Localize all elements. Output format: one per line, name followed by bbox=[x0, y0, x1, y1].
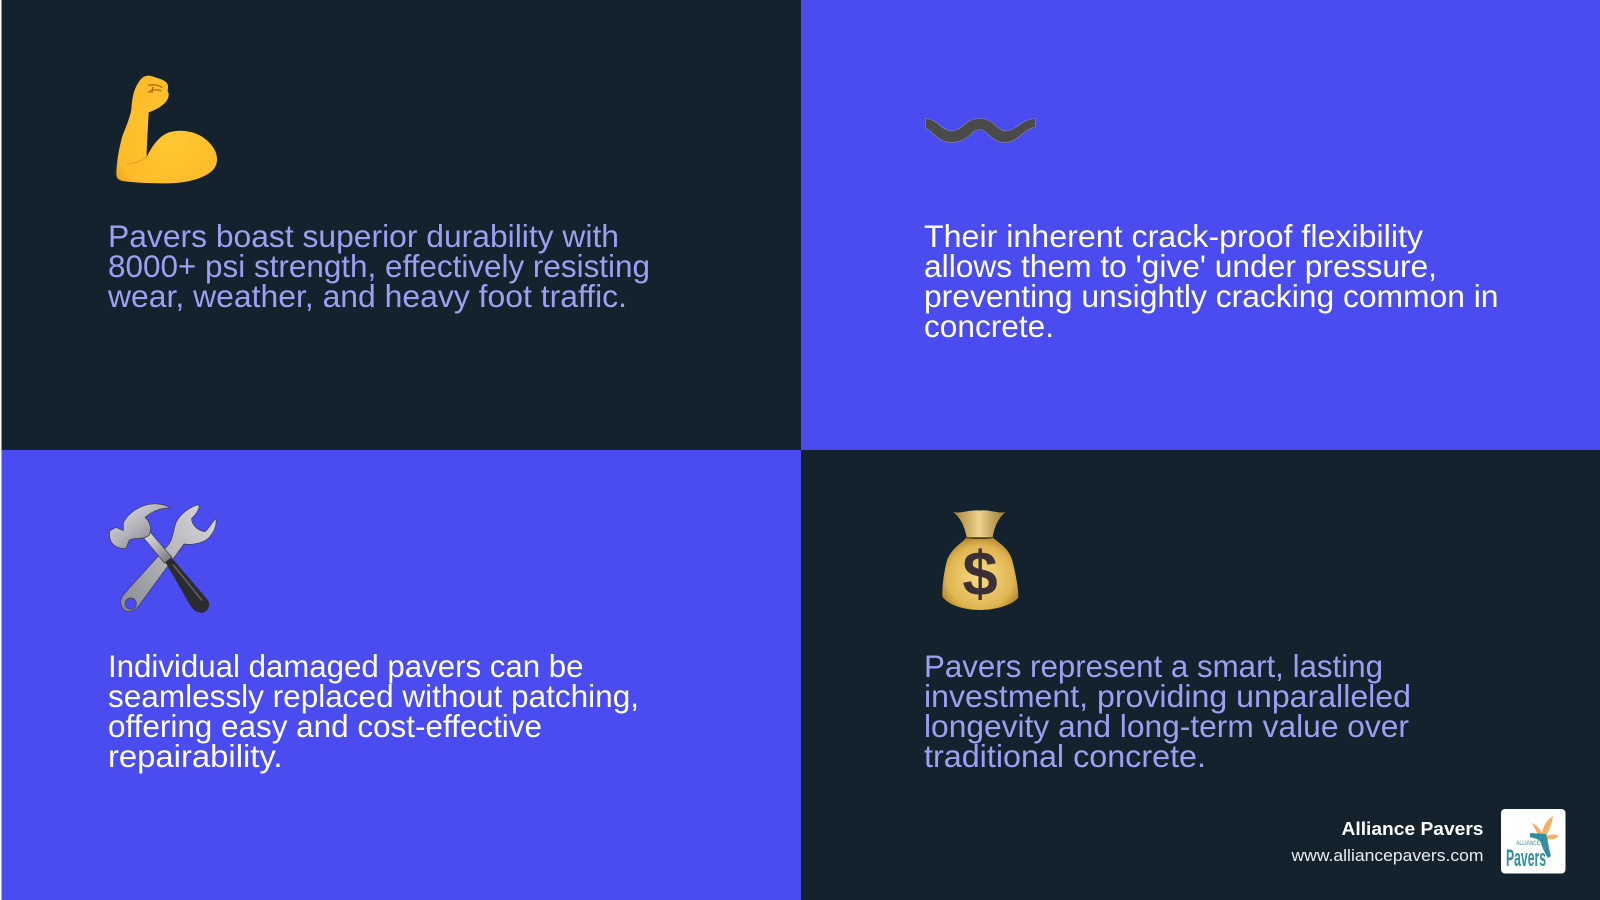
brand footer bbox=[1290, 809, 1566, 874]
description: flexibility: concrete. bbox=[924, 308, 1054, 344]
description: value: traditional concrete. bbox=[924, 738, 1206, 774]
brand name: Alliance Pavers bbox=[1342, 819, 1484, 839]
logo bbox=[1501, 809, 1566, 874]
description: flexibility bbox=[924, 218, 1498, 344]
description: durability: wear, weather, and heavy foot traffic. bbox=[107, 278, 627, 314]
icon: flexed biceps bbox=[116, 76, 217, 183]
description: repairability: Individual damaged pavers can be bbox=[108, 648, 584, 684]
logo: Pavers bbox=[1506, 845, 1546, 872]
description: flexibility: allows them to 'give' under pressure, bbox=[924, 248, 1437, 284]
description: durability: 8000+ psi strength, effectively resisting bbox=[108, 248, 650, 284]
description: flexibility: preventing unsightly cracking common in bbox=[924, 278, 1498, 314]
panel: value bbox=[801, 450, 1600, 900]
description: durability bbox=[107, 218, 650, 314]
logo: ALLIANCE bbox=[1516, 841, 1540, 847]
description: repairability bbox=[108, 648, 639, 774]
description: repairability: offering easy and cost-effective bbox=[108, 708, 542, 744]
description: value: investment, providing unparalleled bbox=[924, 678, 1411, 714]
icon: money bag bbox=[942, 510, 1018, 610]
description: repairability: repairability. bbox=[108, 738, 282, 774]
icon: wavy dash bbox=[926, 118, 1035, 142]
description: durability: Pavers boast superior durability with bbox=[108, 218, 619, 254]
description: value bbox=[924, 648, 1411, 774]
icon: hammer and wrench bbox=[109, 504, 216, 613]
panel: repairability bbox=[2, 450, 801, 900]
description: repairability: seamlessly replaced without patching, bbox=[108, 678, 639, 714]
website: www.alliancepavers.com bbox=[1290, 846, 1484, 865]
panel: durability bbox=[2, 0, 801, 450]
panel: flexibility bbox=[801, 0, 1600, 450]
description: value: Pavers represent a smart, lasting bbox=[924, 648, 1383, 684]
icon: money bag: $ bbox=[962, 539, 998, 609]
description: flexibility: Their inherent crack-proof flexibility bbox=[924, 218, 1423, 254]
description: value: longevity and long-term value over bbox=[924, 708, 1409, 744]
